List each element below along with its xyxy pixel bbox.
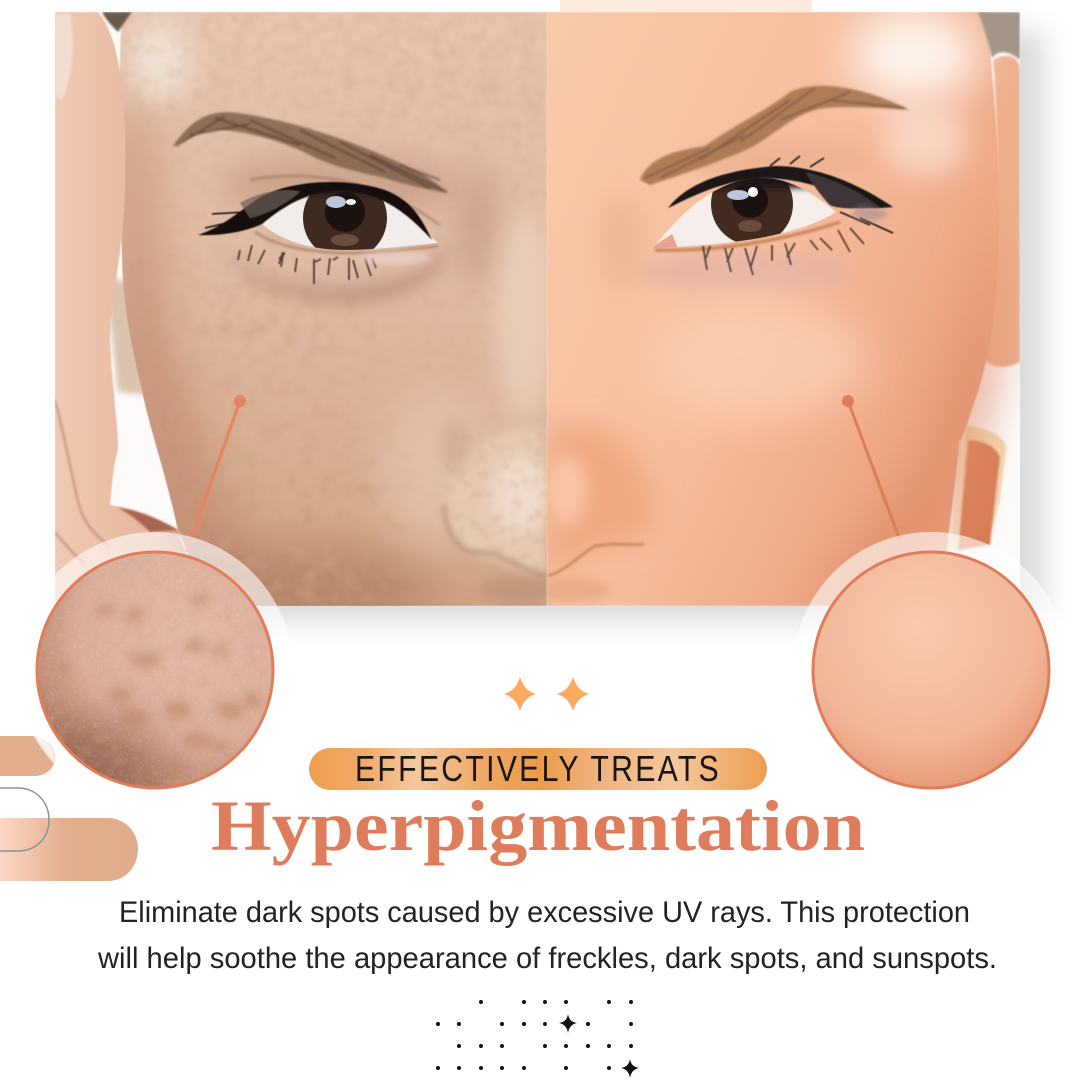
freckle texture bbox=[128, 12, 528, 120]
right face skin bbox=[547, 12, 999, 606]
nose shape bbox=[547, 425, 655, 575]
nose bridge highlight bbox=[495, 210, 555, 430]
right eye bbox=[645, 163, 845, 255]
cheek highlight bbox=[650, 300, 870, 420]
panel: after half (right) bbox=[530, 7, 1020, 606]
body text: will help soothe the appearance of freckles, dark spots, and sunspots. bbox=[97, 942, 997, 975]
under eye tone bbox=[640, 252, 850, 292]
lower rim left bbox=[255, 232, 438, 253]
forehead highlight bbox=[130, 18, 190, 102]
eyebrow left bbox=[172, 112, 447, 193]
lower lashes left bbox=[238, 245, 376, 284]
split highlight bbox=[546, 12, 548, 606]
nose speckle bbox=[445, 430, 547, 570]
lower rim right bbox=[655, 222, 840, 250]
dot pattern with sparkles bbox=[436, 1000, 639, 1078]
jaw pale strip bbox=[955, 440, 962, 545]
brow socket shadow bbox=[706, 144, 838, 173]
inner eye shadow bbox=[602, 190, 638, 290]
hand bbox=[55, 12, 188, 604]
under nose shadow bbox=[483, 576, 547, 606]
skin close-up: before bbox=[0, 552, 273, 820]
cheek side shading bbox=[122, 101, 246, 560]
long bar bbox=[0, 818, 138, 881]
body text bbox=[97, 896, 997, 975]
heading: Hyperpigmentation bbox=[211, 786, 865, 866]
skin close-up: after bbox=[813, 552, 1049, 788]
hair bbox=[978, 12, 1020, 60]
forehead highlight bbox=[850, 7, 980, 103]
nose bulb bbox=[446, 426, 547, 575]
badge: effectively treats: EFFECTIVELY TREATS bbox=[355, 750, 721, 790]
photo shadow bbox=[70, 30, 1045, 622]
body text: Eliminate dark spots caused by excessive UV rays. This protection bbox=[119, 896, 970, 929]
other hand finger bbox=[955, 425, 1006, 550]
palm shadow bbox=[118, 508, 178, 532]
left face skin bbox=[119, 12, 547, 606]
hair wisp bbox=[102, 12, 132, 32]
ear bbox=[984, 56, 1020, 367]
outlined pill bbox=[0, 788, 49, 851]
eyebrow right bbox=[640, 86, 910, 185]
ear behind hand bbox=[110, 276, 144, 398]
pigmentation mottling bbox=[218, 72, 493, 602]
decorative bars bbox=[0, 736, 138, 881]
pale area around nose bbox=[380, 390, 500, 550]
lower lashes right bbox=[703, 228, 864, 275]
halo: right circle bbox=[793, 532, 1069, 808]
icon: two sparkles bbox=[504, 677, 589, 711]
panel: before half (left) bbox=[55, 12, 560, 635]
nose edge line bbox=[547, 544, 644, 576]
pointer: left dot and line bbox=[186, 395, 246, 552]
pointer: right dot and line bbox=[842, 395, 900, 540]
upper lash right bbox=[668, 156, 893, 233]
left eye bbox=[262, 189, 438, 250]
brow socket shadow bbox=[220, 153, 460, 217]
upper lid fold bbox=[250, 176, 440, 225]
under nose shadow bbox=[530, 578, 610, 602]
temple highlight bbox=[883, 104, 967, 176]
under eye shadow bbox=[230, 245, 450, 304]
fingernail highlight bbox=[55, 14, 73, 100]
halo: left circle bbox=[17, 532, 293, 808]
upper lash left bbox=[198, 182, 432, 240]
finger lines bbox=[55, 400, 108, 565]
before and after face photo bbox=[55, 7, 1020, 635]
short bar bbox=[0, 736, 55, 776]
jaw shadow bbox=[226, 530, 448, 606]
inner eye shadow bbox=[454, 165, 502, 285]
top accent strip bbox=[560, 0, 812, 12]
lower eyelid sheen bbox=[360, 251, 430, 265]
edge shade bbox=[806, 272, 1020, 606]
nose edge line bbox=[444, 505, 547, 576]
